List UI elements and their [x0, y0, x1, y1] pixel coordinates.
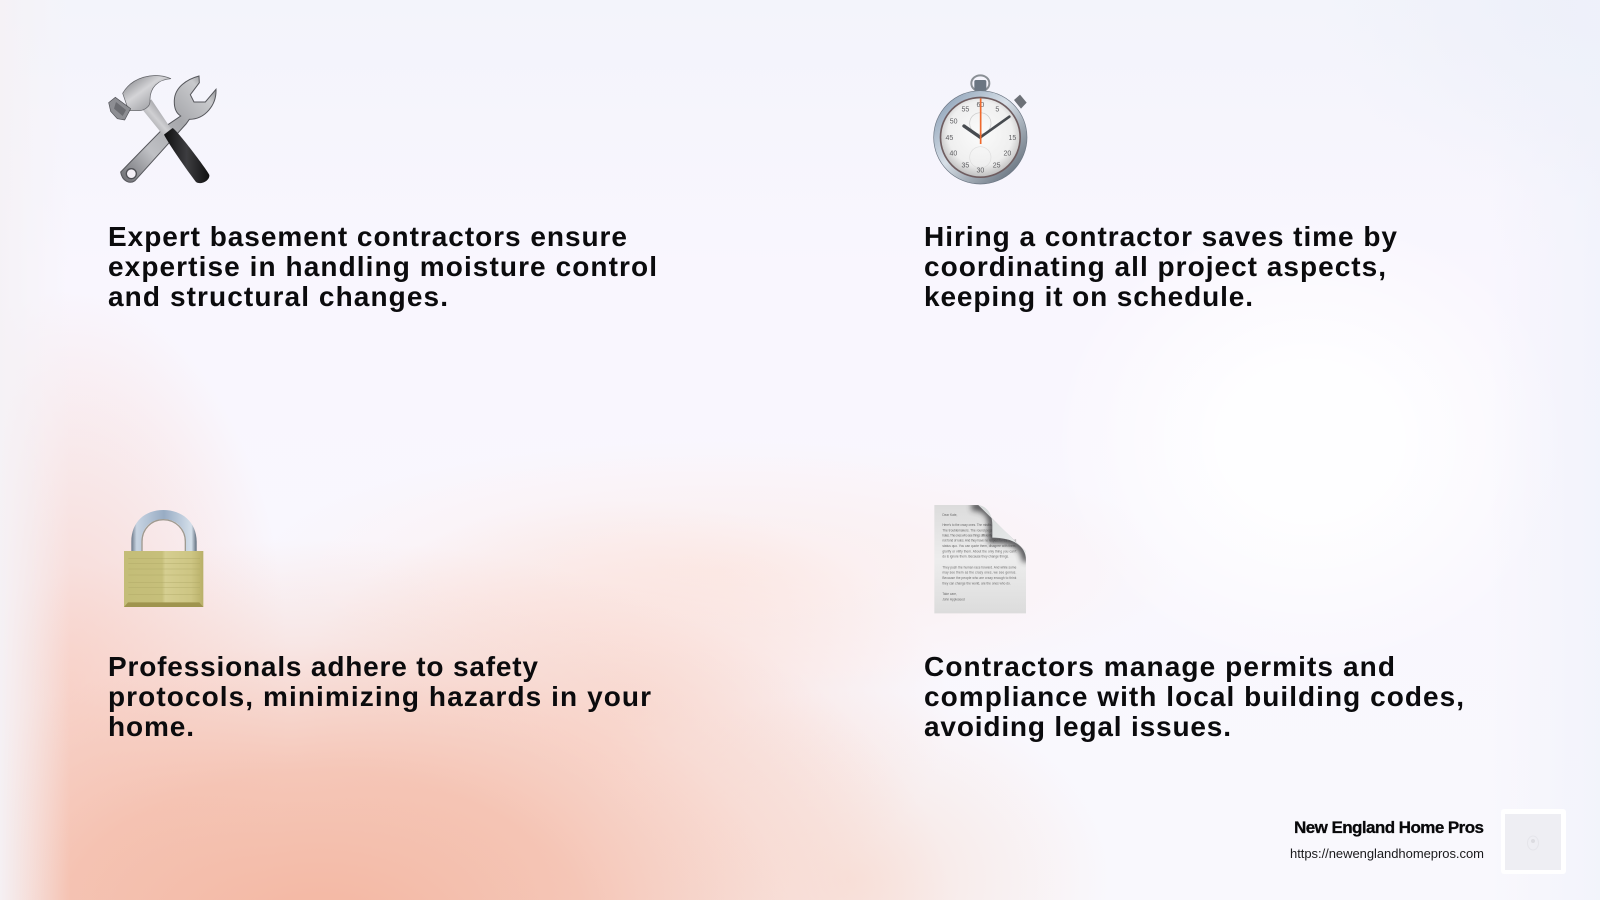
icon: stopwatch: 5: [995, 107, 999, 114]
icon: curled document: status quo. You can quote them, disagree with them,: [942, 544, 1016, 548]
icon: stopwatch: 30: [976, 168, 984, 175]
text: expertise: [108, 221, 657, 312]
icon: stopwatch: [934, 75, 1027, 184]
text: time savings: Hiring a contractor saves time by: [924, 221, 1397, 252]
icon: stopwatch: 35: [961, 162, 969, 169]
logo box: [1501, 809, 1566, 874]
icon: stopwatch: 25: [993, 162, 1001, 169]
text: safety: protocols, minimizing hazards in your: [108, 681, 651, 712]
icon: stopwatch: 20: [1003, 151, 1011, 158]
text: safety: Professionals adhere to safety: [108, 651, 538, 682]
text: time savings: keeping it on schedule.: [924, 281, 1253, 312]
text: safety: home.: [108, 711, 194, 742]
text: permits: Contractors manage permits and: [924, 651, 1395, 682]
panel: safety: [108, 510, 651, 742]
icon: stopwatch: 55: [961, 107, 969, 114]
icon: curled document: The troublemakers. The round pegs: [942, 528, 993, 532]
icon: curled document: holes. The ones who see things differently: [942, 533, 993, 537]
icon: curled document: Because the people who are crazy enough to think: [942, 576, 1017, 580]
icon: curled document: John Appleseed: [942, 597, 965, 601]
brand url: https://newenglandhomepros.com: [1290, 846, 1484, 861]
icon: curled document: Dear Kate,: [942, 513, 958, 517]
footer brand: [1290, 809, 1566, 874]
text: expertise: Expert basement contractors ensure: [108, 221, 627, 252]
icon: stopwatch: 60: [976, 102, 984, 109]
text: time savings: [924, 221, 1397, 312]
icon: curled document: [934, 505, 1026, 613]
text: time savings: coordinating all project aspects,: [924, 251, 1386, 282]
text: permits: compliance with local building codes,: [924, 681, 1464, 712]
icon: curled document: Take care,: [942, 592, 957, 596]
icon: curled document: do is ignore them. Because they change things.: [942, 555, 1009, 559]
icon: stopwatch: 45: [945, 135, 953, 142]
icon: curled document: They push the human race forward. And while some: [942, 565, 1017, 569]
icon: curled document: glorify or vilify them. About the only thing you can't: [942, 549, 1016, 553]
panel: time savings: [924, 75, 1397, 312]
text: permits: avoiding legal issues.: [924, 711, 1231, 742]
icon: stopwatch: 40: [949, 151, 957, 158]
icon: stopwatch: 15: [1008, 135, 1016, 142]
panel: expertise: [108, 76, 657, 312]
text: expertise: and structural changes.: [108, 281, 448, 312]
icon: stopwatch: 50: [950, 119, 958, 126]
icon: curled document: Here's to the crazy ones. The misfits.: [942, 523, 992, 527]
brand name: New England Home Pros: [1294, 818, 1484, 837]
icon: curled document: not fond of rules. And they have no respect for the status: [942, 539, 1017, 543]
panel: permits: [924, 505, 1464, 742]
icon: curled document: may see them as the crazy ones, we see genius.: [942, 571, 1016, 575]
icon: curled document: they can change the world, are the ones who do.: [942, 581, 1011, 585]
text: permits: [924, 651, 1464, 742]
icon: hammer and wrench: [109, 76, 216, 183]
icon: padlock: [124, 510, 203, 607]
text: expertise: expertise in handling moisture control: [108, 251, 657, 282]
text: safety: [108, 651, 651, 742]
